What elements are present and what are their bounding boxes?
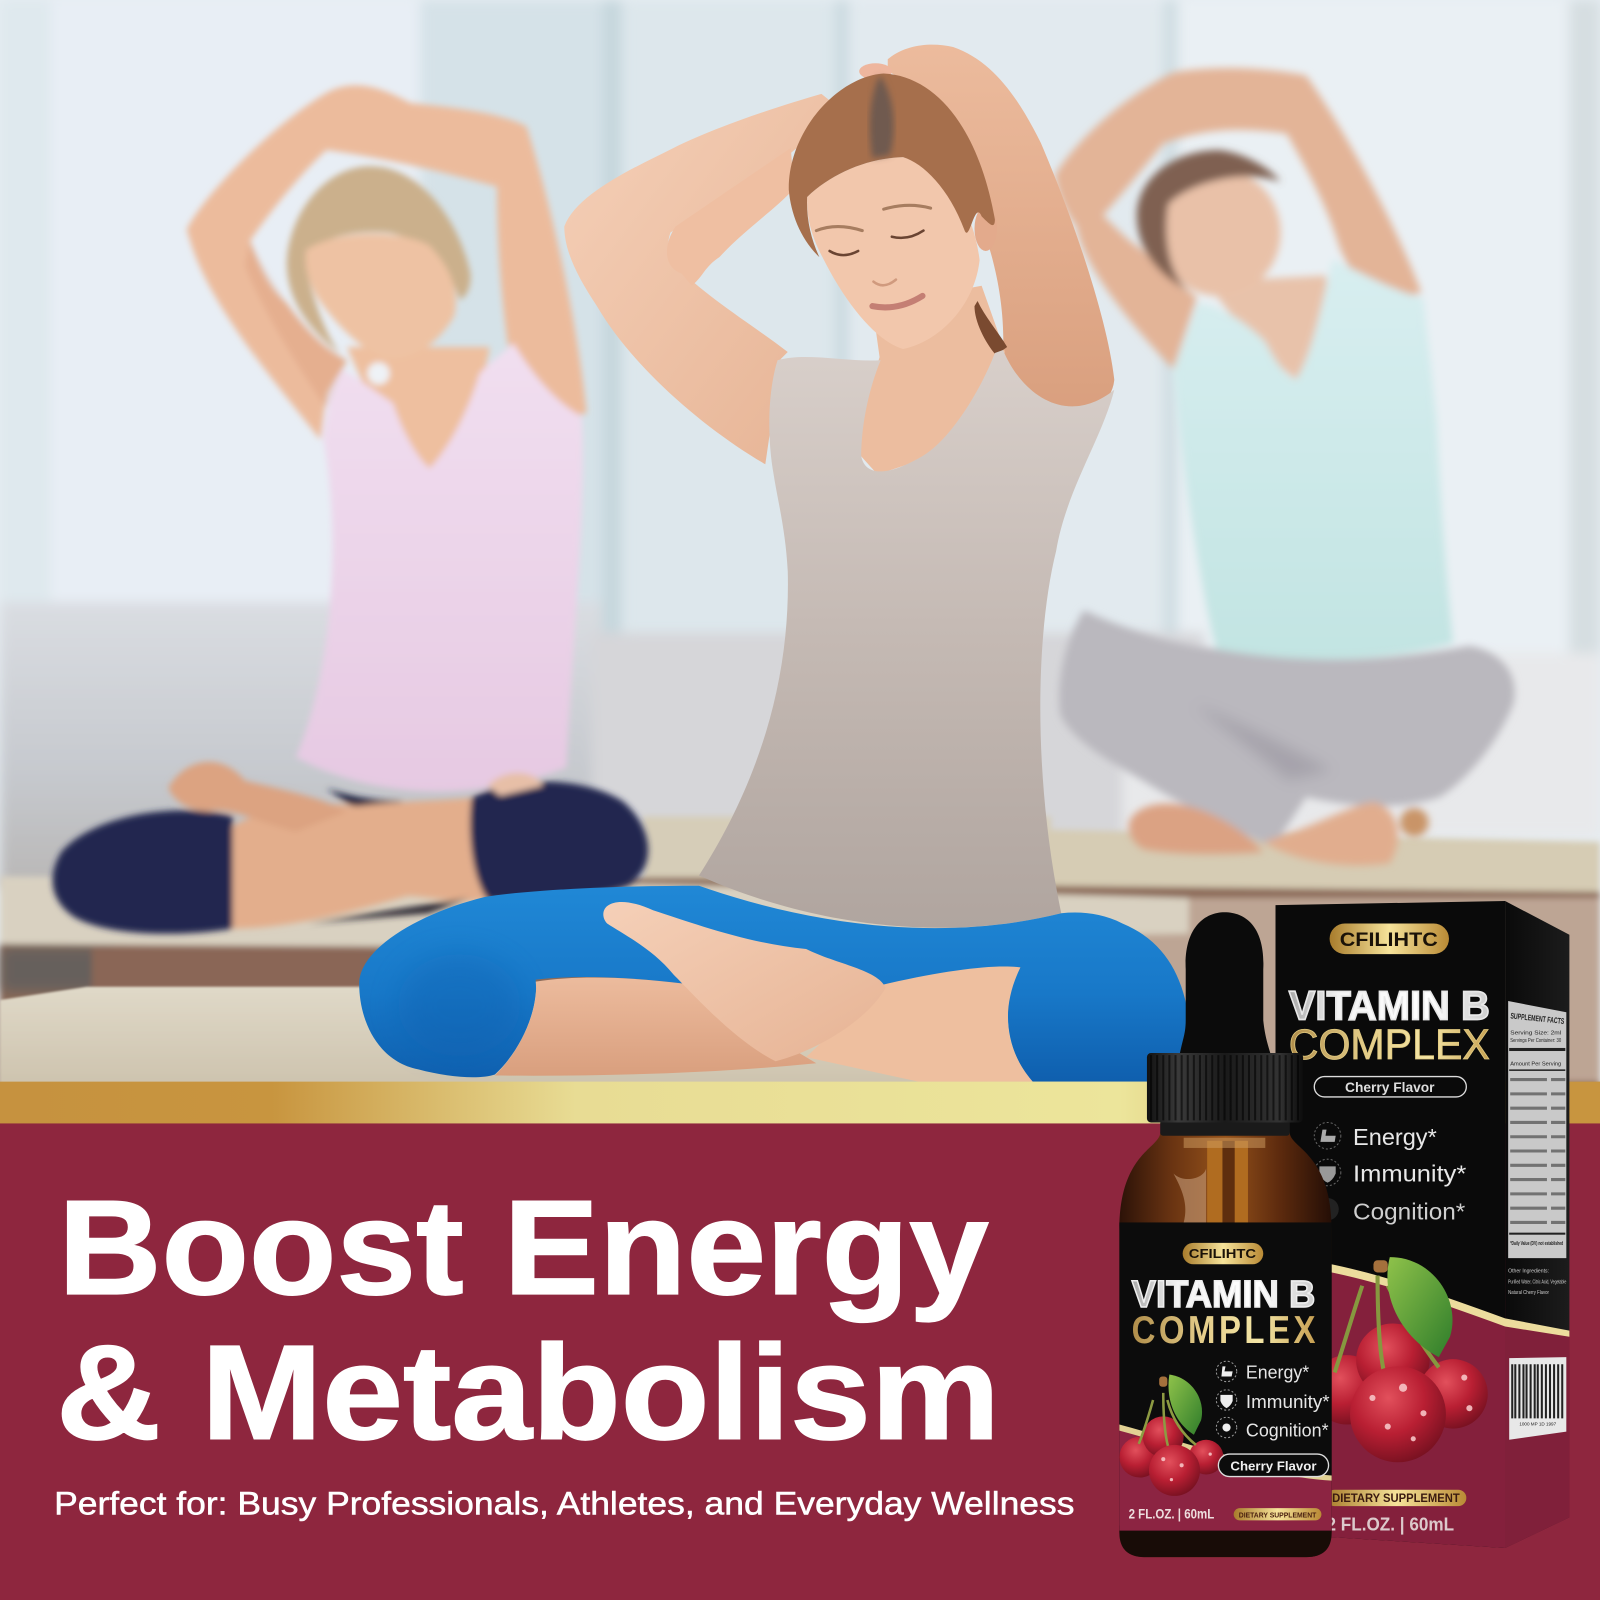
second forearm and hand — [667, 148, 794, 286]
bottle dietary pill — [1234, 1508, 1321, 1520]
bottle logo pill — [1183, 1243, 1263, 1264]
bottle flavor pill: Cherry Flavor — [1230, 1458, 1317, 1473]
background gap by neck — [367, 362, 390, 385]
supplement facts panel: Servings Per Container: 30 — [1510, 1038, 1561, 1044]
hair — [789, 73, 995, 257]
supplement facts panel: SUPPLEMENT FACTS — [1510, 1011, 1565, 1026]
teal top — [1173, 259, 1453, 659]
facial features — [816, 205, 931, 307]
other ingredients — [1508, 1268, 1566, 1296]
blue leggings — [359, 886, 1192, 1082]
right woman in teal top, blurred — [1055, 68, 1515, 865]
bottle label maroon — [1119, 1429, 1332, 1531]
calves — [233, 798, 488, 929]
barcode: 1000 MP 1D 1997 — [1519, 1422, 1557, 1427]
subtitle: Perfect for: Busy Professionals, Athletes, and Everyday Wellness — [54, 1484, 1074, 1521]
face — [807, 157, 980, 349]
pink top — [296, 343, 583, 791]
supplement facts panel: Amount Per Serving — [1510, 1061, 1561, 1067]
box flavor pill — [1314, 1077, 1466, 1097]
hair — [1137, 150, 1281, 291]
left woman in pink top, blurred — [53, 85, 648, 934]
supplement facts panel: Serving Size: 2ml — [1510, 1031, 1561, 1037]
gold band — [0, 1082, 1600, 1123]
ribbed cap — [1147, 1053, 1303, 1122]
supplement facts panel — [1508, 1001, 1566, 1258]
box maroon lower area — [1276, 1265, 1569, 1548]
bottle benefits: Cognition* — [1246, 1420, 1329, 1441]
other ingredients: Other Ingredients: — [1508, 1268, 1549, 1274]
box front — [1276, 901, 1505, 1548]
ear — [974, 206, 997, 251]
box logo pill: CFILIHTC — [1340, 929, 1438, 951]
box side maroon shade — [1505, 1324, 1569, 1548]
box heading — [1289, 982, 1490, 1069]
photo background: yoga studio — [0, 0, 1600, 1092]
floor shadow — [306, 898, 469, 923]
box side — [1505, 901, 1569, 1548]
bottle heading — [1132, 1273, 1316, 1351]
dropper bottle — [1119, 912, 1332, 1557]
box flavor pill: Cherry Flavor — [1345, 1080, 1435, 1095]
fingertips — [859, 63, 892, 80]
feet — [1129, 804, 1263, 854]
arms — [1055, 68, 1421, 369]
maroon panel — [0, 1123, 1600, 1600]
knee shading — [398, 954, 520, 1056]
title: Boost Energy — [58, 1172, 989, 1323]
bottle heading: VITAMIN B — [1132, 1273, 1315, 1315]
bottle label black — [1119, 1222, 1332, 1531]
neck and chest — [859, 286, 1005, 474]
box benefits — [1314, 1122, 1466, 1224]
ponytail — [974, 301, 1007, 355]
bottle benefits: Energy* — [1246, 1362, 1309, 1383]
grey legs — [1059, 610, 1515, 847]
box heading: COMPLEX — [1289, 1021, 1490, 1069]
supplement facts panel: *Daily Value (DV) not established — [1510, 1241, 1563, 1247]
feet — [168, 762, 347, 832]
box benefits: Cognition* — [1353, 1198, 1465, 1224]
face — [1158, 169, 1281, 296]
box heading: VITAMIN B — [1289, 982, 1490, 1028]
box logo pill — [1330, 923, 1449, 954]
navy knees — [53, 810, 233, 934]
bottle logo pill: CFILIHTC — [1189, 1246, 1257, 1261]
hair — [287, 166, 471, 353]
box volume: 2 FL.OZ. | 60mL — [1327, 1514, 1454, 1535]
bottle cherries — [1119, 1374, 1223, 1496]
bottle benefits: Immunity* — [1246, 1391, 1330, 1412]
product box — [1276, 901, 1569, 1548]
bottle flavor pill — [1218, 1454, 1329, 1477]
bottle heading: COMPLEX — [1132, 1307, 1316, 1351]
barcode — [1509, 1357, 1566, 1440]
title: & Metabolism — [56, 1317, 1000, 1468]
left arm — [564, 94, 842, 464]
center woman in grey shirt, in focus — [359, 45, 1192, 1082]
grey t-shirt — [699, 350, 1114, 928]
neck — [1206, 276, 1327, 380]
bottle volume: 2 FL.OZ. | 60mL — [1129, 1506, 1214, 1521]
right arm over head — [888, 45, 1114, 415]
bottle base dark — [1119, 1526, 1332, 1557]
arms — [187, 85, 587, 440]
other ingredients: Natural Cherry Flavor — [1508, 1290, 1549, 1296]
bottle dietary pill: DIETARY SUPPLEMENT — [1239, 1510, 1317, 1519]
neck and chest — [347, 347, 490, 471]
floor and mats — [0, 816, 1600, 1092]
box cherries — [1312, 1257, 1488, 1462]
collar — [1160, 1120, 1290, 1136]
amber glass — [1119, 1133, 1332, 1557]
foot — [603, 902, 886, 1061]
face — [306, 234, 456, 359]
rubber bulb — [1179, 912, 1272, 1061]
title — [56, 1172, 1000, 1468]
bottle benefits — [1216, 1361, 1330, 1441]
box dietary pill: DIETARY SUPPLEMENT — [1332, 1492, 1460, 1505]
box benefits: Immunity* — [1353, 1161, 1466, 1187]
legs skin — [495, 978, 816, 1076]
other ingredients: Purified Water, Citric Acid, Vegetable — [1508, 1280, 1566, 1286]
box benefits: Energy* — [1353, 1124, 1437, 1150]
